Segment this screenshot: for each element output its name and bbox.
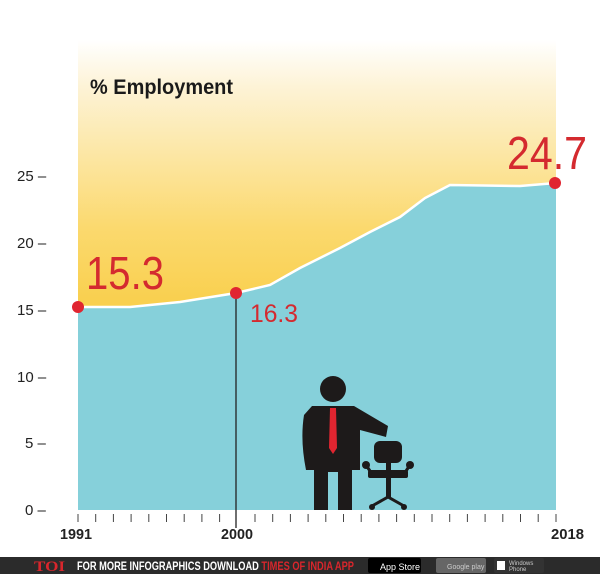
y axis labels: 15 – [17,302,47,319]
value labels [86,127,587,328]
x axis labels [60,526,584,543]
y axis labels: 0 – [25,502,47,519]
value labels: 16.3 [250,300,298,328]
x axis labels: 1991 [60,526,92,543]
chart background [78,40,556,510]
y axis labels: 25 – [17,168,47,185]
title: % Employment [90,76,233,99]
data points [72,177,561,313]
value labels: 24.7 [507,127,587,179]
2000 marker line [235,293,237,528]
year ticks [78,514,556,522]
footer bar: Google play [447,564,485,571]
x axis labels: 2000 [221,526,253,543]
icon: businessman with chair [302,376,414,510]
value labels: 15.3 [86,247,164,299]
x axis labels: 2018 [551,526,584,543]
footer bar: FOR MORE INFOGRAPHICS DOWNLOAD TIMES OF INDIA APP [77,559,354,573]
footer bar: App Store [380,562,420,572]
area: employment [78,183,556,510]
footer bar [0,557,600,574]
y axis labels: 10 – [17,369,47,386]
y axis labels: 5 – [25,435,47,452]
line [78,183,556,307]
y axis labels: 20 – [17,235,47,252]
y axis labels [17,168,47,519]
icon: tie [329,408,337,454]
footer bar: Windows [509,561,533,567]
footer bar: Phone [509,567,527,573]
